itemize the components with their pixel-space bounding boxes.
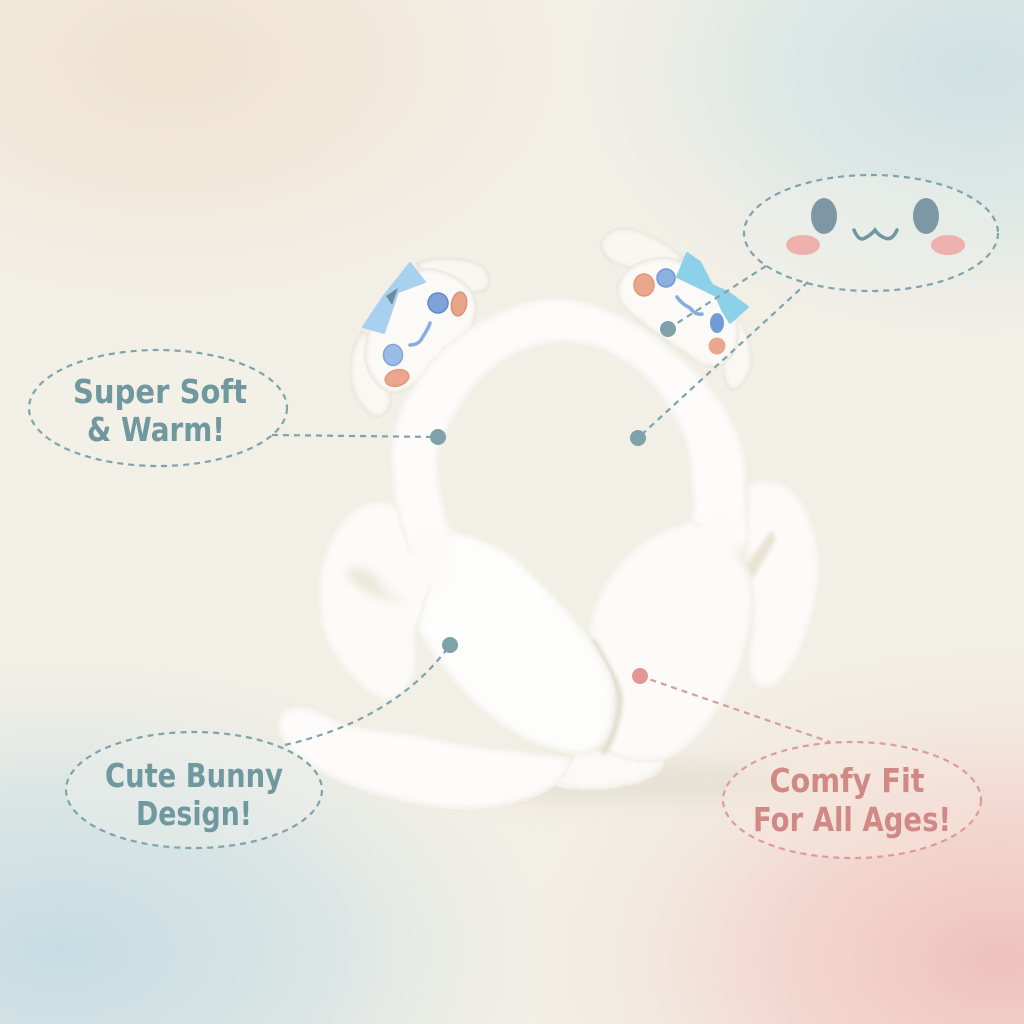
callout: Comfy Fit: For All Ages!	[753, 800, 951, 839]
right charm far ear	[722, 310, 753, 391]
callout: Super Soft & Warm	[29, 350, 287, 466]
left ear cup	[416, 530, 615, 755]
leader line: comfy	[632, 668, 830, 742]
callout: Cute Bunny Design: Cute Bunny	[105, 756, 283, 795]
callout: face	[744, 175, 998, 291]
cup seam shadow	[592, 640, 620, 753]
right charm face and bow	[634, 253, 748, 354]
left charm top ear	[415, 257, 491, 294]
right flap inner shading	[746, 530, 776, 580]
callout: Super Soft & Warm: & Warm!	[87, 410, 225, 449]
leader line: bunny	[285, 637, 458, 745]
callout: Cute Bunny Design: Design!	[136, 794, 252, 833]
right bunny ear	[600, 228, 685, 275]
right strap	[550, 749, 666, 790]
callout: Comfy Fit: Comfy Fit	[770, 761, 925, 800]
left strap	[277, 706, 574, 810]
ground shadow	[450, 762, 790, 802]
leader line: soft	[272, 429, 446, 445]
icon: kawaii face	[786, 198, 965, 255]
right charm head	[617, 257, 739, 368]
flap fold shading	[345, 567, 410, 604]
leader lines: face	[630, 266, 808, 446]
right outer ear flap	[745, 480, 820, 689]
left outer ear flap	[318, 500, 445, 703]
left charm face and bow	[363, 263, 468, 389]
right ear cup	[588, 520, 754, 762]
callout: Comfy Fit	[723, 742, 981, 858]
left charm head	[364, 268, 477, 394]
earmuffs product	[277, 228, 820, 810]
callout: Cute Bunny Design	[66, 732, 322, 848]
callout: Super Soft & Warm: Super Soft	[73, 372, 247, 411]
left charm far ear	[350, 330, 392, 418]
headband	[391, 297, 748, 555]
fur joins	[408, 511, 744, 589]
